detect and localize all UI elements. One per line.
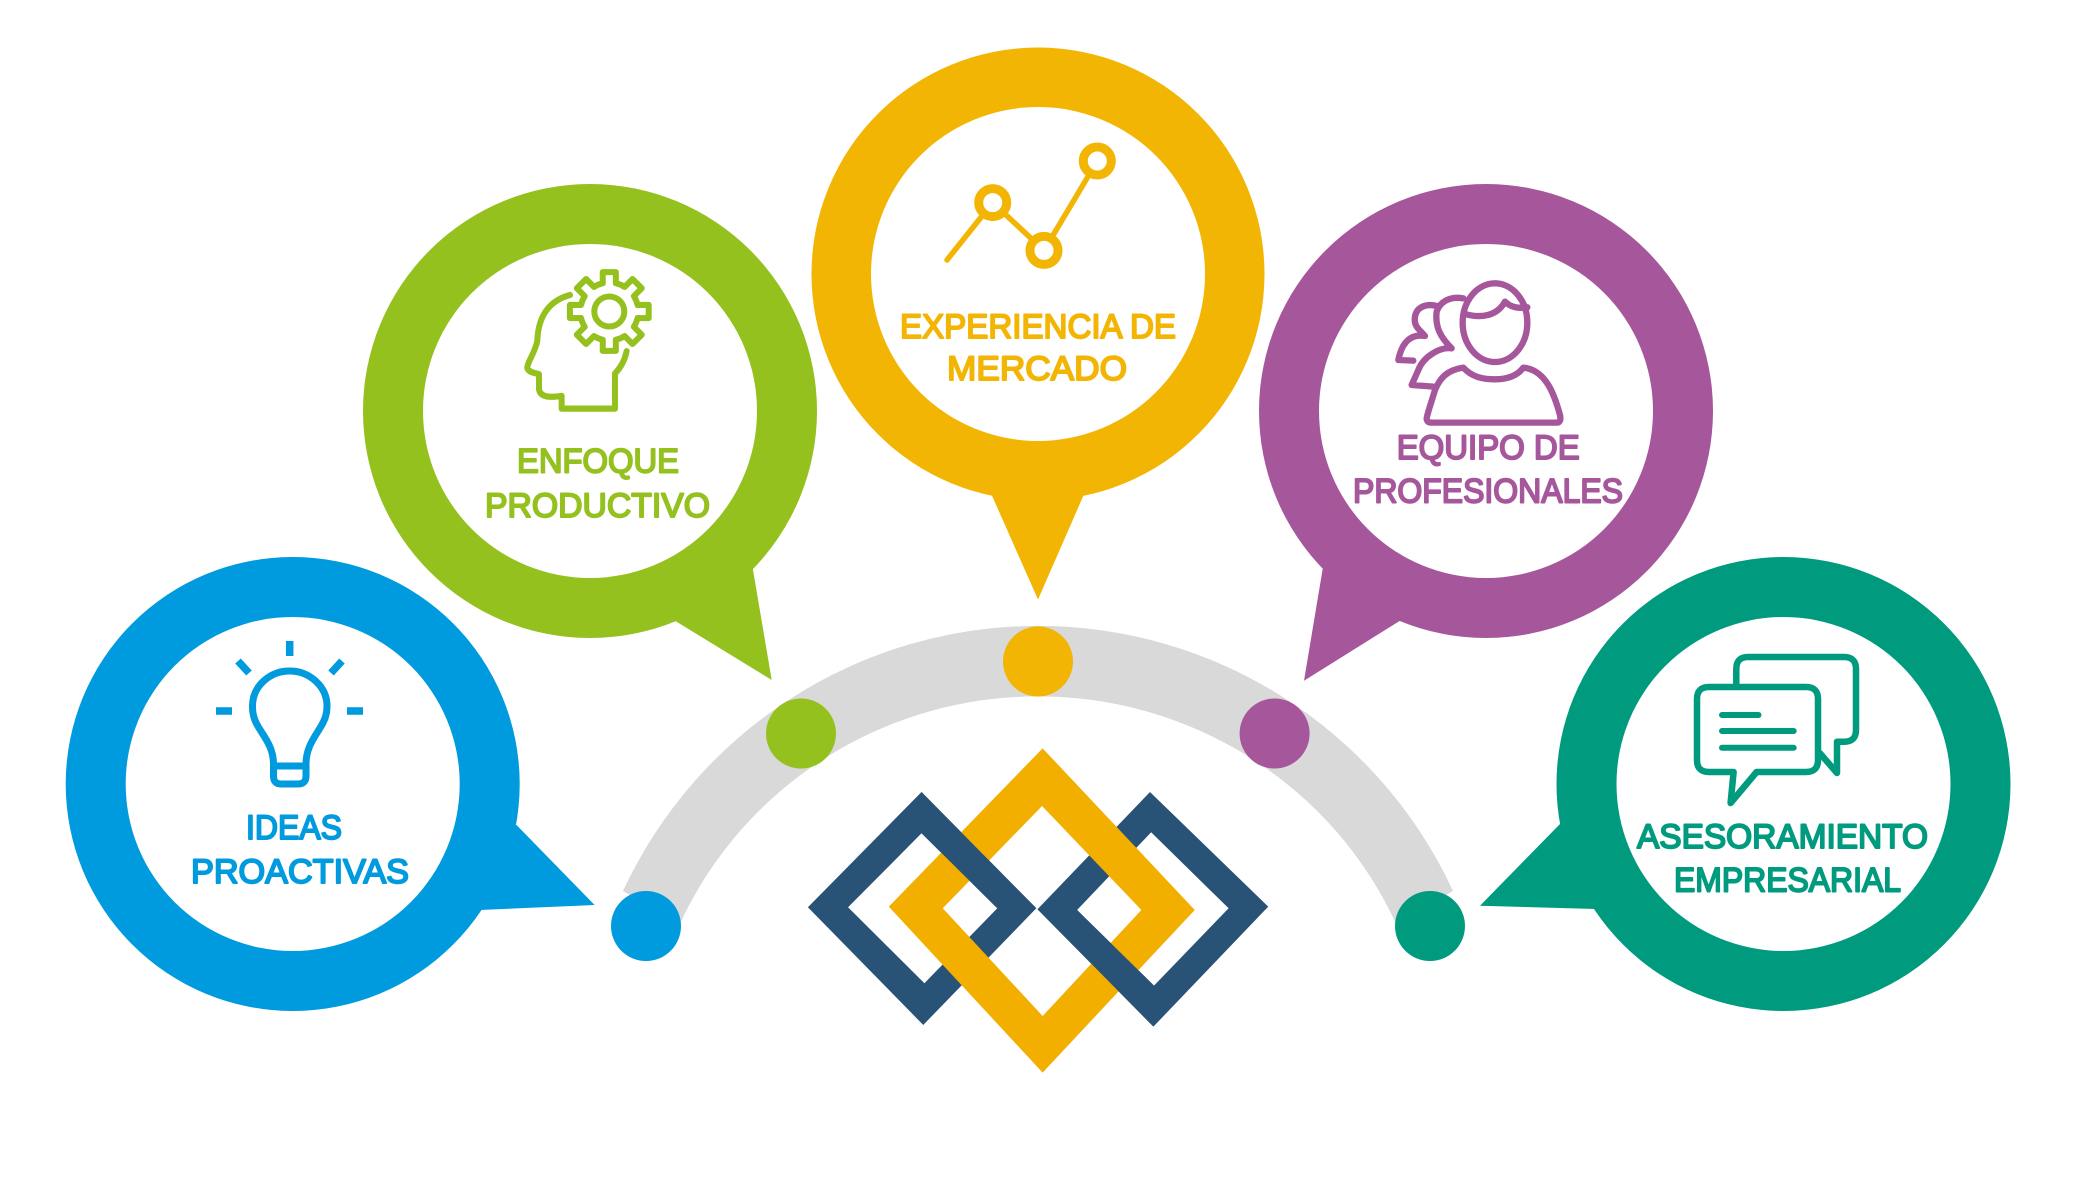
panel: asesoramiento empresarial bbox=[1480, 557, 2010, 1011]
panel: enfoque productivo bbox=[363, 184, 817, 680]
label: PROACTIVAS bbox=[191, 853, 409, 891]
panel: ideas proactivas bbox=[66, 557, 595, 1011]
speech bubble bbox=[363, 184, 817, 680]
label: IDEAS bbox=[246, 809, 342, 847]
label: PRODUCTIVO bbox=[485, 487, 710, 525]
logo: interlaced diamonds bbox=[808, 748, 1268, 1073]
label bbox=[900, 308, 1176, 388]
label: EQUIPO DE bbox=[1397, 429, 1580, 467]
arc connector with dots bbox=[611, 626, 1465, 961]
speech bubble bbox=[1259, 184, 1713, 681]
label: ENFOQUE bbox=[517, 443, 679, 481]
label bbox=[1637, 818, 1928, 900]
label: MERCADO bbox=[947, 350, 1127, 388]
label: EXPERIENCIA DE bbox=[900, 308, 1176, 346]
icon: light bulb bbox=[216, 641, 363, 784]
panel: equipo de profesionales bbox=[1259, 184, 1713, 681]
icon: team of people bbox=[1398, 283, 1560, 423]
icon: line chart bbox=[947, 147, 1111, 264]
label bbox=[485, 443, 710, 525]
label: ASESORAMIENTO bbox=[1637, 818, 1928, 856]
label: EMPRESARIAL bbox=[1674, 862, 1901, 900]
panel: experiencia de mercado bbox=[812, 48, 1264, 600]
icon: chat bubbles bbox=[1697, 657, 1856, 803]
icon: head with gear bbox=[527, 272, 649, 409]
speech bubble bbox=[1480, 557, 2010, 1011]
label bbox=[1353, 429, 1623, 511]
label: PROFESIONALES bbox=[1353, 473, 1623, 511]
label bbox=[191, 809, 409, 891]
speech bubble bbox=[66, 557, 595, 1011]
speech bubble bbox=[812, 48, 1264, 600]
